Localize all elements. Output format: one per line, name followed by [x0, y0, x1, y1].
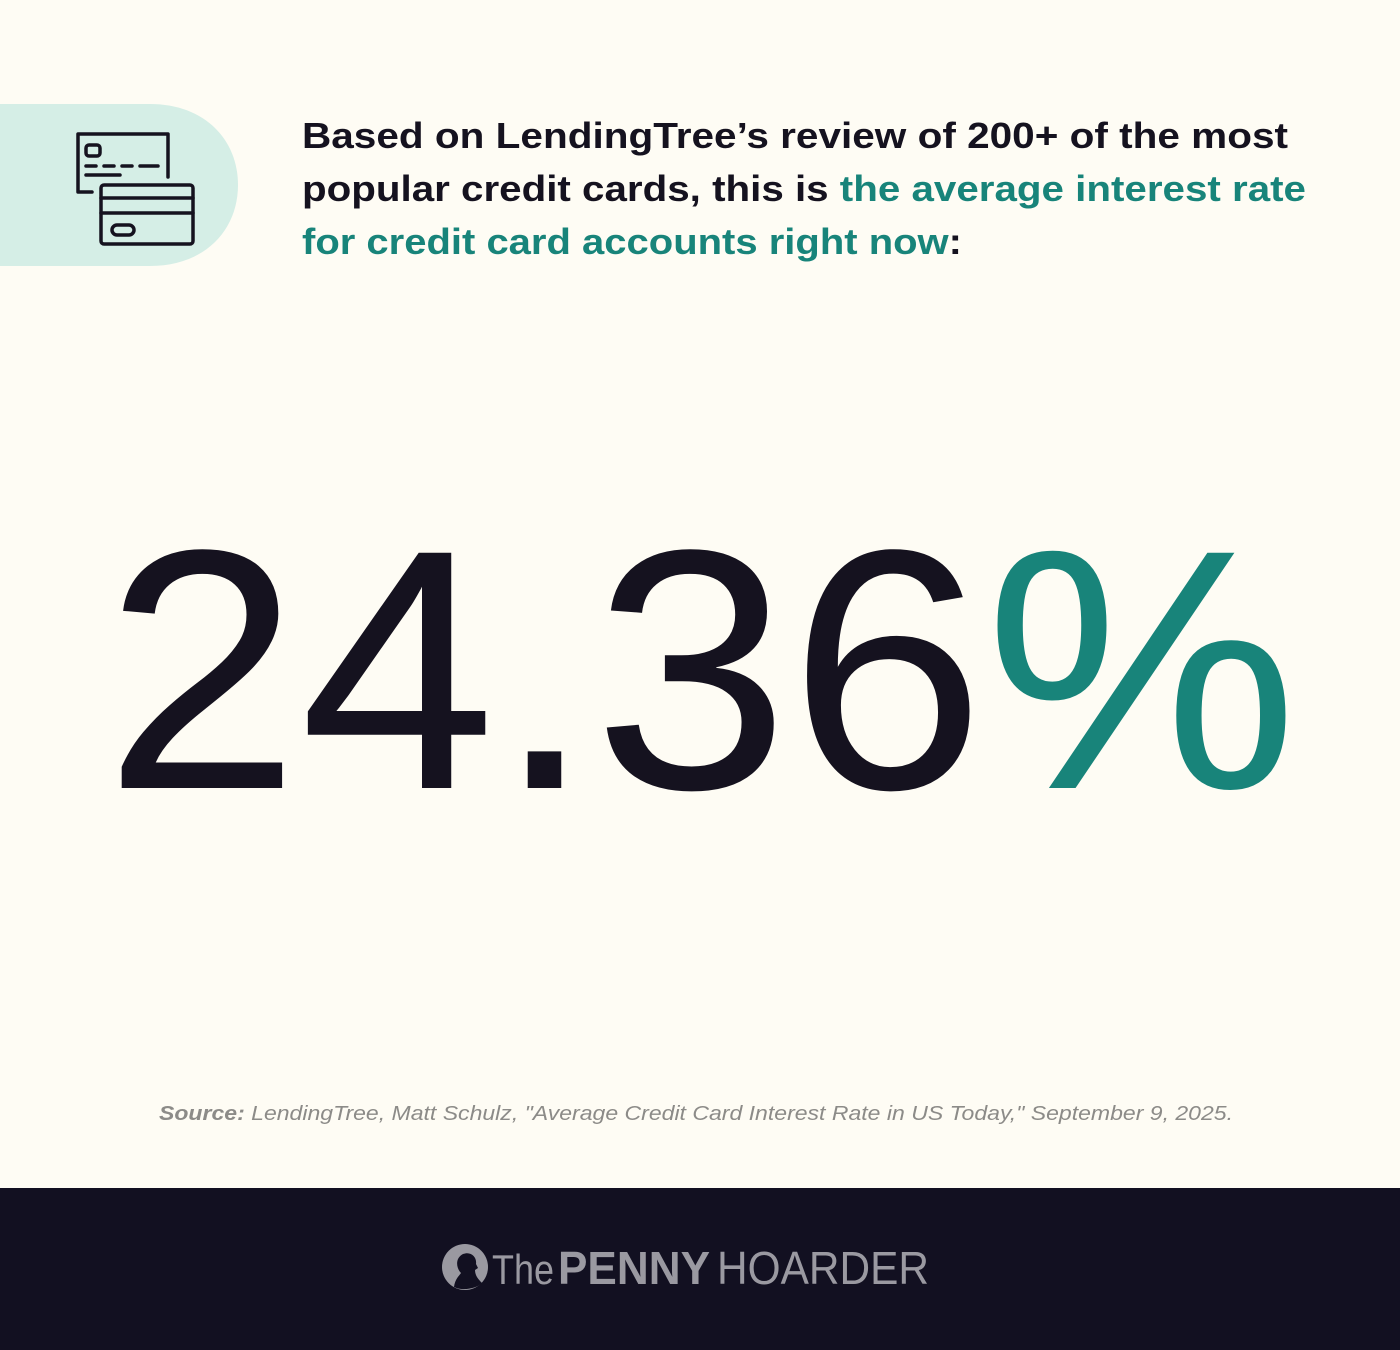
icon: credit cards — [78, 134, 193, 244]
logo: The Penny Hoarder — [442, 1242, 929, 1294]
big number: 24.36%: 24.36% — [104, 479, 1298, 861]
icon: silhouette coin — [442, 1244, 488, 1290]
source text: Source: LendingTree, Matt Schulz, "Average Credit Card Interest Rate in US Today," September 9, 2025. — [159, 1103, 1233, 1125]
heading text — [302, 115, 1306, 262]
logo: The Penny Hoarder: The — [492, 1246, 554, 1293]
logo: The Penny Hoarder: PENNY — [558, 1242, 710, 1294]
heading text: Based on LendingTree’s review of 200+ of the most — [302, 115, 1288, 156]
footer bar — [0, 1188, 1400, 1350]
icon panel: credit cards badge — [0, 104, 238, 266]
heading text: for credit card accounts right now : — [302, 221, 962, 262]
heading text: popular credit cards, this is the average interest rate — [302, 168, 1306, 209]
logo: The Penny Hoarder: HOARDER — [717, 1242, 929, 1294]
